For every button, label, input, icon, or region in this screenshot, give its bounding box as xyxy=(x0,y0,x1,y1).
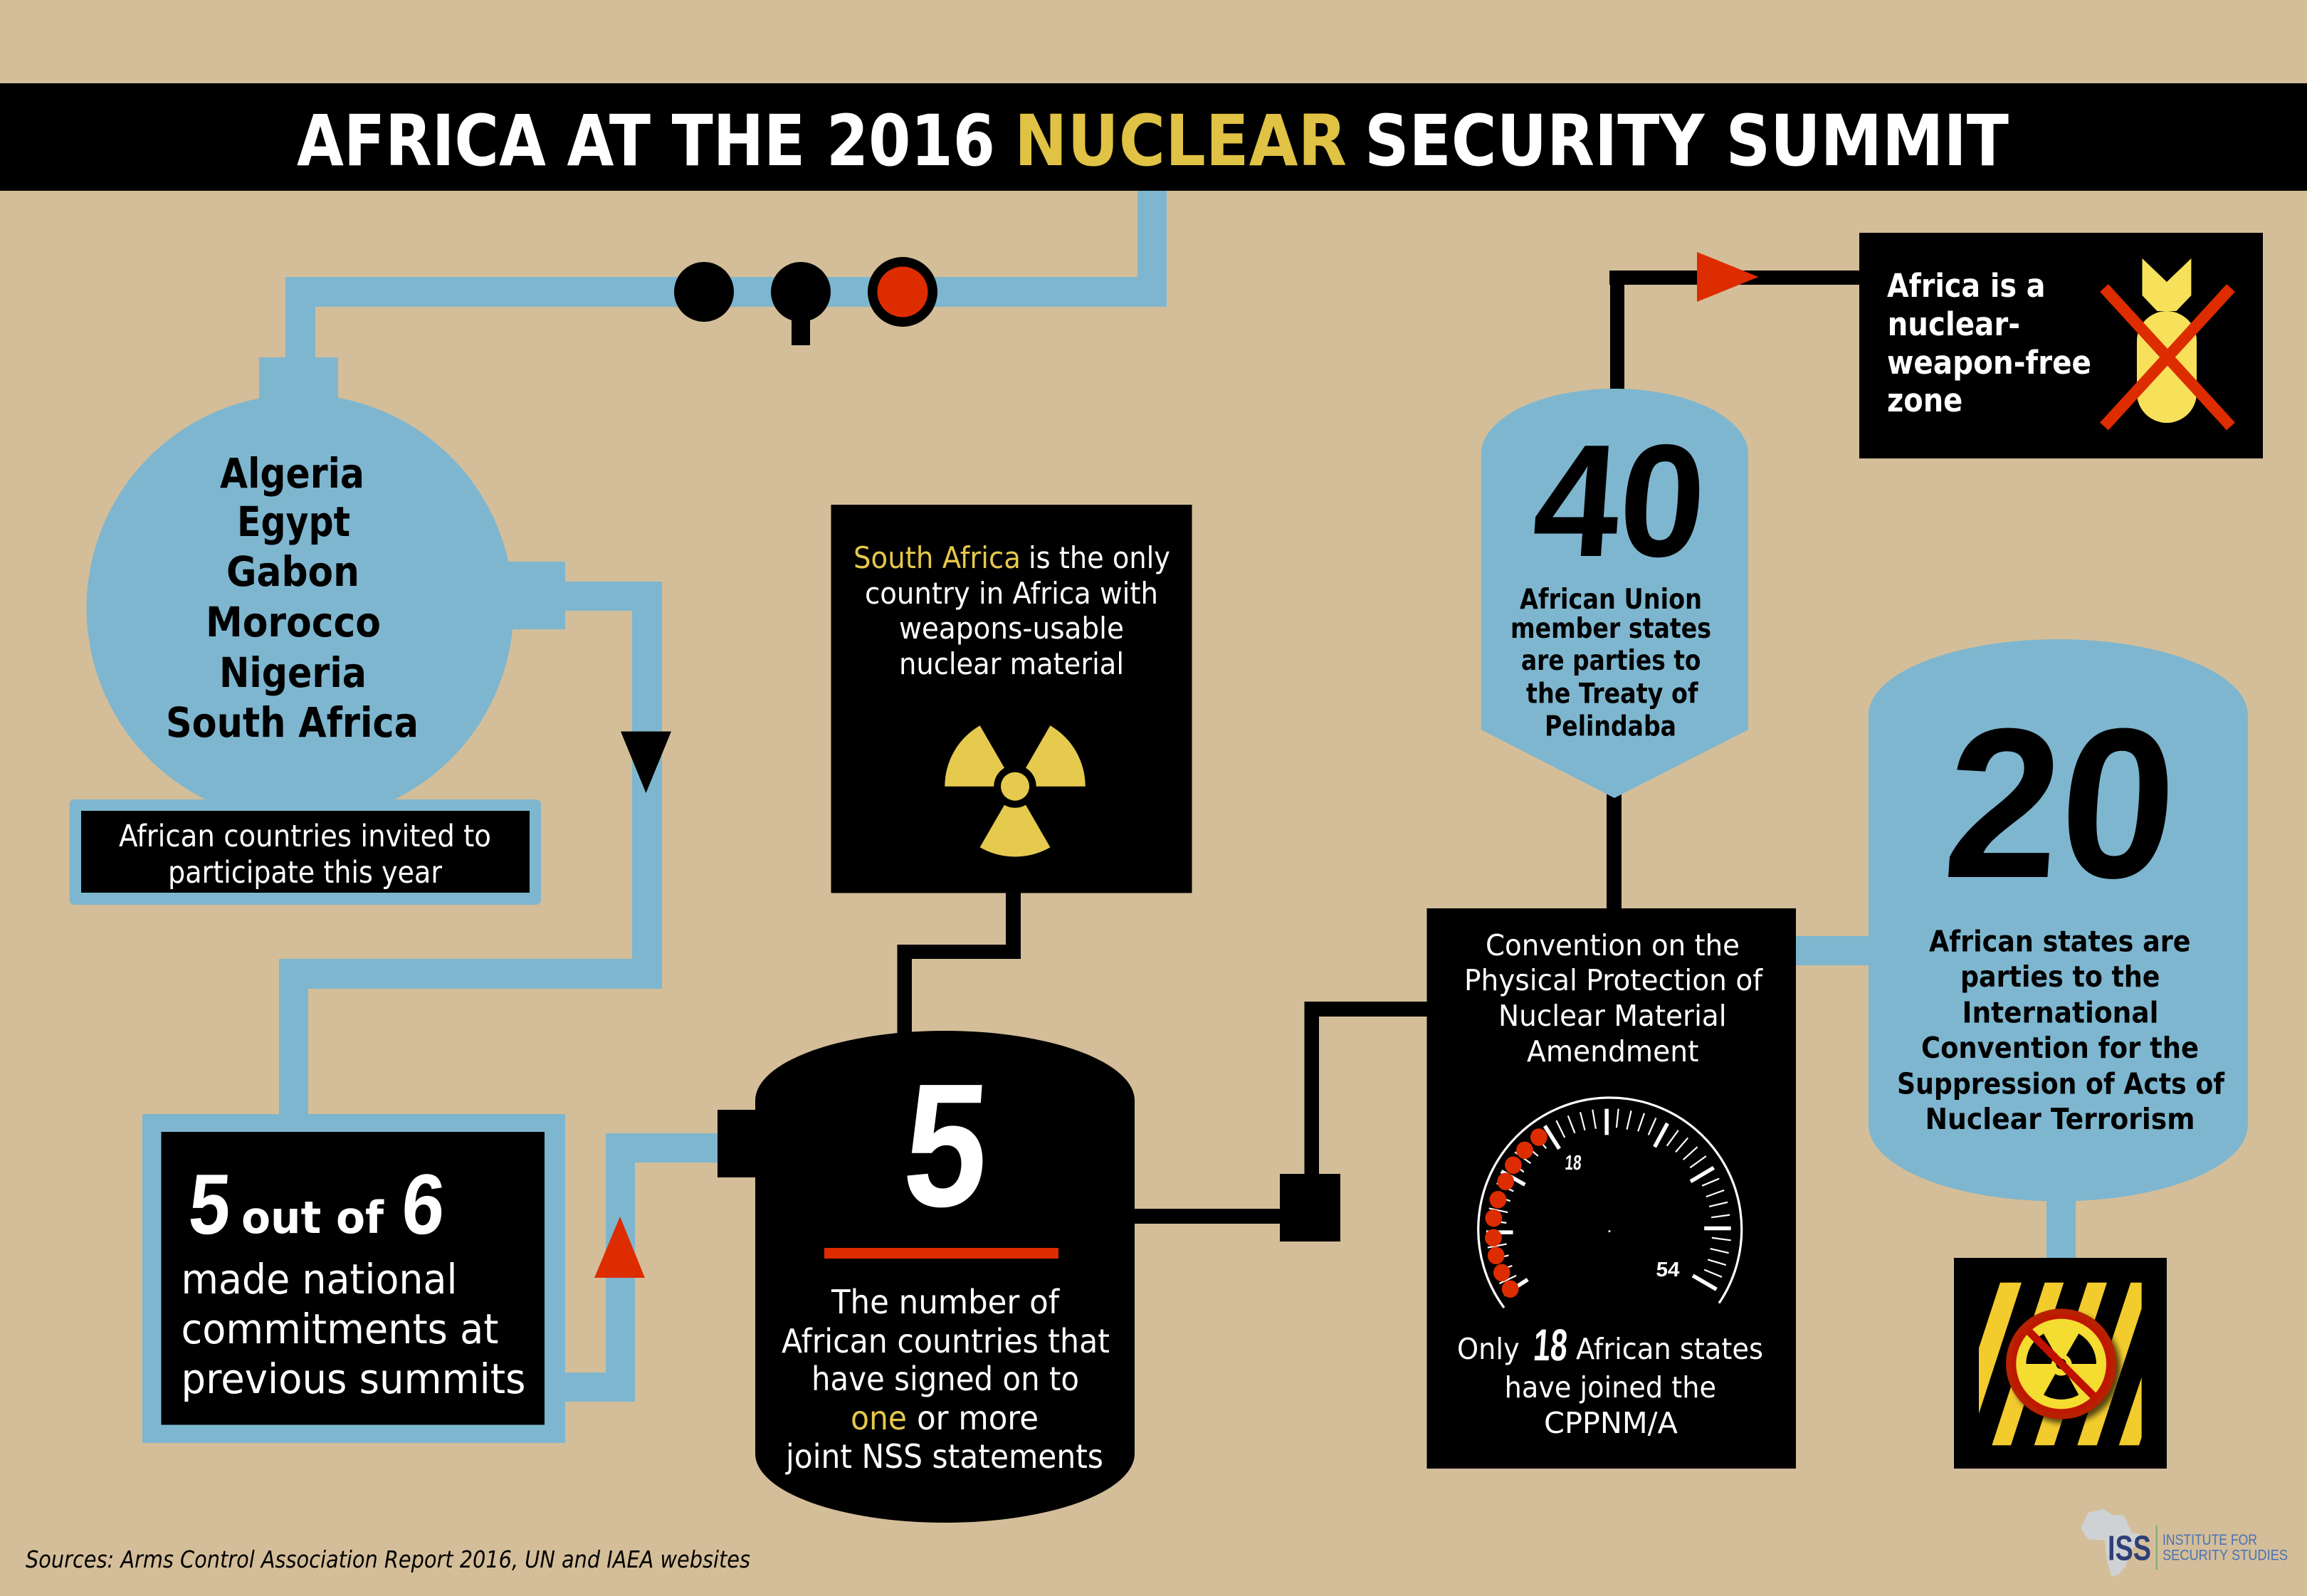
convention stat text xyxy=(1457,1321,1763,1440)
caption: invited countries: African countries invited to xyxy=(119,819,491,854)
stat: 5 out of 6: out of xyxy=(241,1192,384,1244)
panel: nuclear terrorism convention tank xyxy=(1869,639,2248,1202)
commitments text xyxy=(181,1255,525,1403)
pipe: commitments box to cylinder xyxy=(565,1133,718,1402)
tank text: parties to the xyxy=(1960,960,2160,994)
zone text: nuclear- xyxy=(1888,305,2020,343)
logo: Institute for Security Studies: INSTITUTE FOR xyxy=(2163,1531,2257,1548)
connector: tank to hazard icon xyxy=(2046,1196,2076,1260)
connector: shield to convention box xyxy=(1607,794,1622,911)
country list: Nigeria xyxy=(219,649,367,697)
cylinder text: one xyxy=(851,1399,907,1437)
icon: radiation trefoil xyxy=(945,725,1086,856)
gauge label: 18: 18 xyxy=(1565,1152,1582,1175)
gauge label: 54: 54 xyxy=(1656,1259,1681,1281)
convention stat text: CPPNM/A xyxy=(1544,1406,1678,1440)
convention stat text: African states xyxy=(1576,1332,1763,1366)
caption: invited countries: participate this year xyxy=(168,855,442,891)
tank text: Nuclear Terrorism xyxy=(1925,1102,2195,1136)
radiation text: nuclear material xyxy=(899,646,1124,681)
country list xyxy=(166,449,419,747)
caption: invited countries xyxy=(70,799,541,905)
pipe: sphere to commitments box xyxy=(279,582,662,1114)
title banner: NUCLEAR xyxy=(1014,100,1347,182)
cylinder text: The number of xyxy=(831,1283,1061,1321)
logo: Institute for Security Studies xyxy=(2081,1509,2288,1577)
icon: no-radiation hazard panel xyxy=(1954,1258,2167,1469)
title banner xyxy=(0,83,2307,191)
tank text: Suppression of Acts of xyxy=(1897,1067,2225,1101)
country list: South Africa xyxy=(166,698,419,747)
cylinder text xyxy=(782,1283,1110,1476)
zone text: Africa is a xyxy=(1887,267,2046,305)
stat: 5 out of 6 xyxy=(186,1157,448,1252)
commitments text: made national xyxy=(181,1255,457,1303)
panel: joint statements cylinder xyxy=(755,1031,1135,1523)
icon: crossed-out bomb xyxy=(2104,258,2231,426)
stat: 40: 40 xyxy=(1528,411,1711,590)
panel: Treaty of Pelindaba shield xyxy=(1481,389,1748,798)
gauge dial xyxy=(1478,1098,1742,1308)
panel: invited countries sphere xyxy=(87,357,565,821)
tank text xyxy=(1897,925,2225,1136)
cylinder text: or more xyxy=(917,1399,1039,1437)
zone text: weapon-free xyxy=(1887,344,2091,382)
title banner: AFRICA AT THE 2016 xyxy=(297,100,995,182)
convention stat text: Only xyxy=(1457,1332,1520,1366)
shield text: the Treaty of xyxy=(1526,678,1698,710)
shield text: member states xyxy=(1510,613,1711,645)
arrow: up xyxy=(594,1217,645,1278)
connector: shield to bomb box xyxy=(1609,271,1862,392)
cylinder text: African countries that xyxy=(782,1322,1110,1360)
stat: 5: 5 xyxy=(898,1047,995,1244)
convention stat text: 18 xyxy=(1532,1321,1569,1370)
shield text: African Union xyxy=(1520,584,1702,616)
logo: Institute for Security Studies: ISS xyxy=(2108,1530,2151,1568)
convention heading: Physical Protection of xyxy=(1464,963,1763,997)
connector: radiation box to cylinder xyxy=(897,890,1021,1039)
panel: national commitments xyxy=(142,1114,565,1443)
panel: nuclear-weapon-free zone xyxy=(1859,233,2263,458)
country list: Egypt xyxy=(237,498,350,546)
red divider xyxy=(824,1248,1058,1259)
convention heading xyxy=(1464,928,1763,1069)
shield text xyxy=(1510,584,1711,743)
commitments text: commitments at xyxy=(181,1305,498,1353)
pipe: title to sphere xyxy=(285,191,1167,357)
convention heading: Nuclear Material xyxy=(1498,999,1727,1033)
tank text: African states are xyxy=(1929,925,2191,959)
country list: Gabon xyxy=(226,547,359,596)
connector: cylinder to convention box xyxy=(1132,1002,1428,1241)
gauge red markers xyxy=(1485,1128,1547,1298)
convention heading: Convention on the xyxy=(1486,928,1740,962)
tank text: International xyxy=(1962,996,2158,1030)
country list: Algeria xyxy=(220,449,364,498)
arrow: down xyxy=(621,732,671,793)
convention heading: Amendment xyxy=(1527,1034,1698,1069)
tank text: Convention for the xyxy=(1921,1031,2199,1065)
panel: physical protection convention xyxy=(1426,908,1796,1469)
source note: Sources: Arms Control Association Report 2016, UN and IAEA websites xyxy=(26,1545,750,1573)
shield text: are parties to xyxy=(1521,645,1701,677)
connector: convention box to tank xyxy=(1794,936,1872,965)
arrow: right xyxy=(1697,252,1758,302)
country list: Morocco xyxy=(206,598,381,646)
valves on top pipe xyxy=(674,257,937,345)
zone text xyxy=(1887,267,2091,419)
cylinder text: joint NSS statements xyxy=(785,1437,1103,1476)
stat: 5 out of 6: 6 xyxy=(399,1157,448,1252)
stat: 20: 20 xyxy=(1938,683,2184,923)
radiation text: is the only xyxy=(1029,540,1170,575)
shield text: Pelindaba xyxy=(1545,710,1676,743)
radiation text: weapons-usable xyxy=(899,611,1124,646)
radiation text: country in Africa with xyxy=(865,576,1158,611)
convention stat text: have joined the xyxy=(1505,1370,1716,1405)
stat: 5 out of 6: 5 xyxy=(186,1157,234,1252)
radiation text: South Africa xyxy=(853,540,1021,575)
panel: radiation fact xyxy=(831,505,1192,893)
cylinder text: have signed on to xyxy=(811,1360,1079,1398)
commitments text: previous summits xyxy=(181,1355,525,1403)
radiation text xyxy=(853,540,1170,681)
zone text: zone xyxy=(1887,382,1962,419)
title banner: SECURITY SUMMIT xyxy=(1365,100,2009,182)
left nozzle of cylinder xyxy=(718,1110,760,1177)
logo: Institute for Security Studies: SECURITY STUDIES xyxy=(2163,1547,2288,1564)
